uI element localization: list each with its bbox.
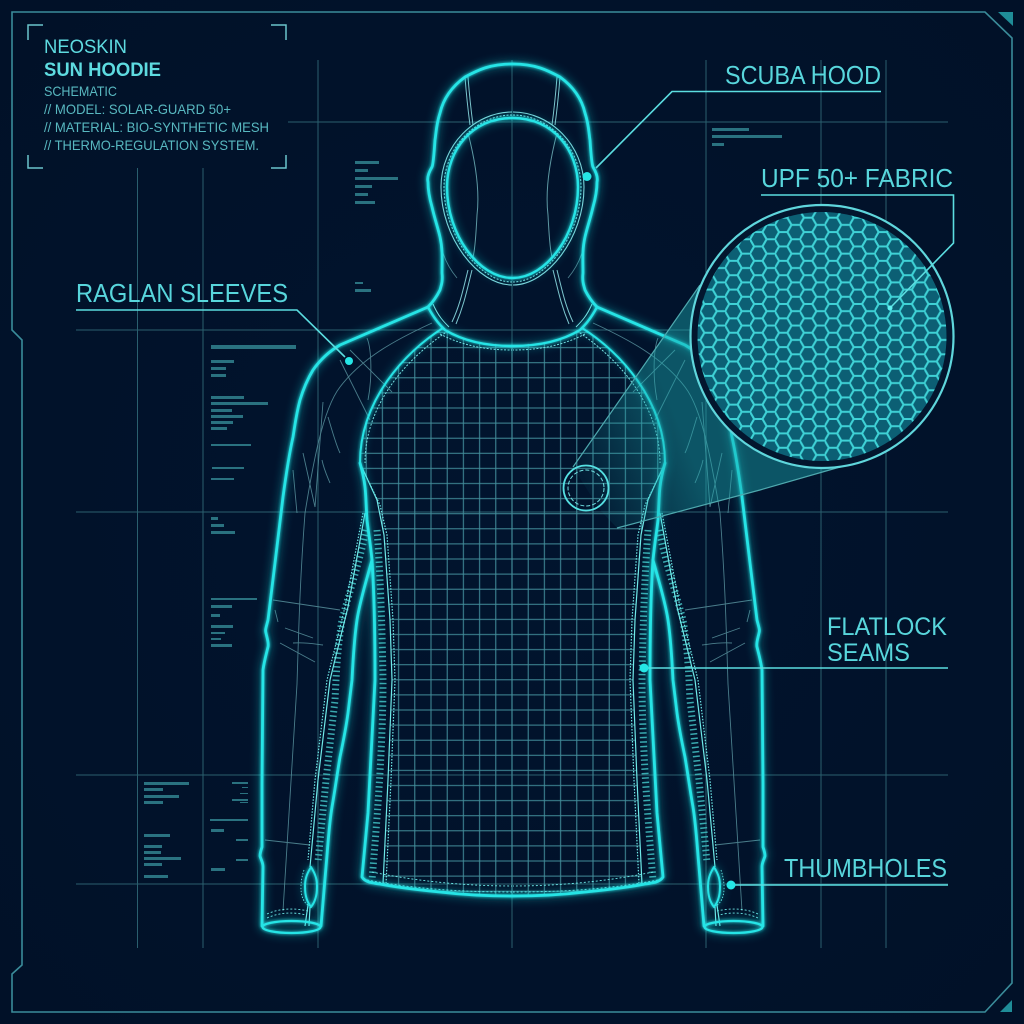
data bars left column xyxy=(211,345,296,647)
specification text: // MATERIAL: BIO-SYNTHETIC MESH xyxy=(44,119,269,135)
callout: UPF fabric xyxy=(761,163,954,310)
callout: flatlock seams: FLATLOCK xyxy=(827,613,947,641)
specification text xyxy=(44,83,269,153)
title: NEOSKIN xyxy=(44,36,127,58)
title block xyxy=(28,25,286,168)
callout: flatlock seams xyxy=(640,613,948,672)
data bars lower left xyxy=(144,782,248,878)
callout: UPF fabric: UPF 50+ FABRIC xyxy=(761,163,953,193)
callout: scuba hood: SCUBA HOOD xyxy=(725,60,881,90)
specification text: // THERMO-REGULATION SYSTEM. xyxy=(44,137,259,153)
callout: raglan sleeves: RAGLAN SLEEVES xyxy=(76,278,288,308)
callout: raglan sleeves xyxy=(76,278,353,365)
hoodie schematic xyxy=(260,64,765,933)
fine sleeve and hood detail lines xyxy=(265,253,457,911)
hood opening stitching xyxy=(441,112,512,285)
callout: scuba hood xyxy=(582,60,881,181)
small inspection circle xyxy=(564,466,608,510)
subtitle: SUN HOODIE xyxy=(44,59,161,81)
data bars near hood xyxy=(355,128,782,292)
fabric magnified circle xyxy=(690,205,954,468)
callout: flatlock seams: SEAMS xyxy=(827,639,910,667)
background grid xyxy=(76,60,948,948)
side panel stitch texture xyxy=(318,530,383,880)
left half of hoodie xyxy=(260,64,512,933)
cone edges xyxy=(573,285,840,528)
specification text: // MODEL: SOLAR-GUARD 50+ xyxy=(44,101,231,117)
callout: thumbholes: THUMBHOLES xyxy=(784,853,947,883)
hood panel seams xyxy=(452,77,478,324)
side panel seams xyxy=(267,463,512,926)
main glowing outline xyxy=(260,64,512,933)
specification text: SCHEMATIC xyxy=(44,83,117,99)
right half of hoodie xyxy=(513,64,765,933)
corner brackets xyxy=(28,25,286,168)
torso mesh grid xyxy=(361,332,664,894)
callout: thumbholes xyxy=(726,853,948,890)
raglan and collar stitch lines xyxy=(365,304,512,463)
magnifier cone xyxy=(573,285,840,528)
